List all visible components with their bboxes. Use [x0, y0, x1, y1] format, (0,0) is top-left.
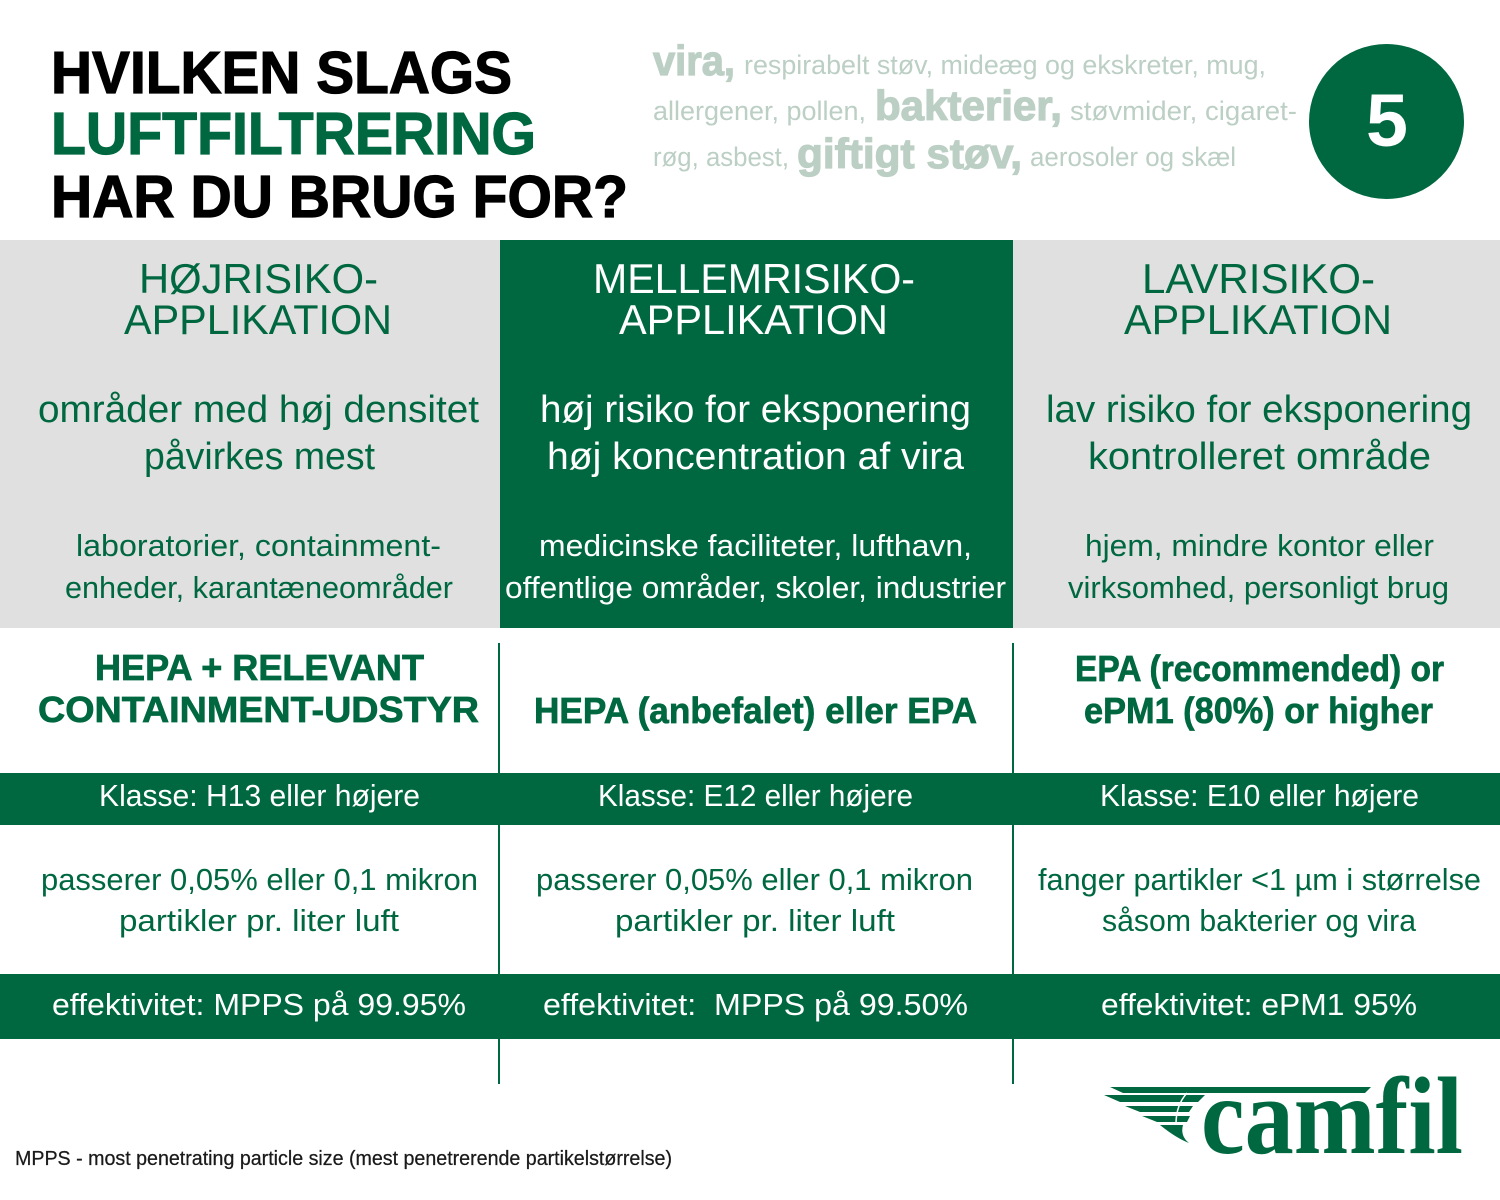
- footnote: MPPS - most penetrating particle size (mest penetrerende partikelstørrelse): [15, 1148, 672, 1170]
- title: HAR DU BRUG FOR?: [51, 164, 628, 230]
- pollutant word list: støvmider, cigaret-: [1070, 96, 1297, 126]
- examples: medium risk: [505, 528, 1006, 605]
- pollutant word list: [653, 37, 1297, 177]
- title: HVILKEN SLAGS: [51, 40, 512, 106]
- heading: low risk: LAVRISIKO-: [1142, 255, 1375, 302]
- performance: high risk: [41, 862, 478, 938]
- pollutant word list: vira,: [653, 37, 735, 84]
- description: medium risk: høj risiko for eksponering: [540, 389, 971, 431]
- description: medium risk: høj koncentration af vira: [547, 436, 965, 478]
- heading: low risk: APPLIKATION: [1124, 296, 1392, 343]
- examples: medium risk: offentlige områder, skoler, industrier: [505, 570, 1006, 605]
- description: high risk: [38, 389, 479, 478]
- pollutant word list: respirabelt støv, mideæg og ekskreter, mug,: [744, 50, 1266, 80]
- wordmark: camfil: [1201, 1055, 1463, 1177]
- description: high risk: områder med høj densitet: [38, 389, 479, 431]
- pollutant word list: aerosoler og skæl: [1030, 142, 1236, 172]
- heading: medium risk: APPLIKATION: [619, 296, 888, 343]
- filter type: low risk: ePM1 (80%) or higher: [1084, 690, 1433, 731]
- filter type: low risk: [1075, 648, 1444, 731]
- title: [51, 40, 628, 230]
- performance: low risk: såsom bakterier og vira: [1102, 903, 1417, 938]
- description: low risk: lav risiko for eksponering: [1046, 389, 1472, 431]
- heading: medium risk: [593, 255, 915, 343]
- title: LUFTFILTRERING: [51, 101, 536, 167]
- performance: medium risk: [536, 862, 973, 938]
- performance: high risk: partikler pr. liter luft: [119, 903, 399, 938]
- performance: low risk: fanger partikler <1 µm i størrelse: [1038, 862, 1481, 897]
- filter type: high risk: CONTAINMENT-UDSTYR: [38, 689, 479, 730]
- filter type: high risk: [38, 647, 479, 730]
- efficiency: medium risk: effektivitet: MPPS på 99.50%: [543, 987, 968, 1022]
- number badge: [1309, 44, 1464, 199]
- efficiency band: [0, 974, 1500, 1039]
- performance: medium risk: partikler pr. liter luft: [615, 903, 895, 938]
- panel: high risk: [0, 240, 500, 628]
- class band: [0, 773, 1500, 825]
- description: low risk: [1046, 389, 1472, 478]
- examples: low risk: virksomhed, personligt brug: [1068, 570, 1449, 605]
- filter type: low risk: EPA (recommended) or: [1075, 648, 1444, 689]
- class: low risk: Klasse: E10 eller højere: [1100, 778, 1419, 813]
- heading: medium risk: MELLEMRISIKO-: [593, 255, 915, 302]
- performance: medium risk: passerer 0,05% eller 0,1 mikron: [536, 862, 973, 897]
- description: high risk: påvirkes mest: [144, 436, 375, 478]
- icon: wing: [1104, 1087, 1371, 1143]
- pollutant word list: røg, asbest,: [653, 142, 789, 172]
- filter type: medium risk: HEPA (anbefalet) eller EPA: [534, 690, 977, 731]
- heading: high risk: HØJRISIKO-: [139, 255, 378, 302]
- examples: medium risk: medicinske faciliteter, lufthavn,: [539, 528, 972, 563]
- performance: low risk: [1038, 862, 1481, 938]
- logo: camfil: [1104, 1055, 1463, 1177]
- examples: high risk: enheder, karantæneområder: [65, 570, 453, 605]
- pollutant word list: giftigt støv,: [797, 130, 1022, 177]
- heading: high risk: APPLIKATION: [124, 296, 392, 343]
- efficiency: high risk: effektivitet: MPPS på 99.95%: [52, 987, 466, 1022]
- pollutant word list: bakterier,: [875, 82, 1062, 129]
- pollutant word list: allergener, pollen,: [653, 96, 866, 126]
- panel: low risk: [1013, 240, 1500, 628]
- examples: high risk: [65, 528, 453, 605]
- heading: low risk: [1124, 255, 1392, 343]
- panel: medium risk: [500, 240, 1013, 628]
- description: low risk: kontrolleret område: [1088, 436, 1431, 478]
- examples: low risk: [1068, 528, 1449, 605]
- examples: low risk: hjem, mindre kontor eller: [1085, 528, 1434, 563]
- class: high risk: Klasse: H13 eller højere: [99, 778, 420, 813]
- examples: high risk: laboratorier, containment-: [76, 528, 441, 563]
- efficiency: low risk: effektivitet: ePM1 95%: [1101, 987, 1417, 1022]
- description: medium risk: [540, 389, 971, 478]
- filter type: high risk: HEPA + RELEVANT: [95, 647, 424, 688]
- number badge: 5: [1366, 79, 1408, 162]
- class: medium risk: Klasse: E12 eller højere: [598, 778, 913, 813]
- heading: high risk: [124, 255, 392, 343]
- performance: high risk: passerer 0,05% eller 0,1 mikron: [41, 862, 478, 897]
